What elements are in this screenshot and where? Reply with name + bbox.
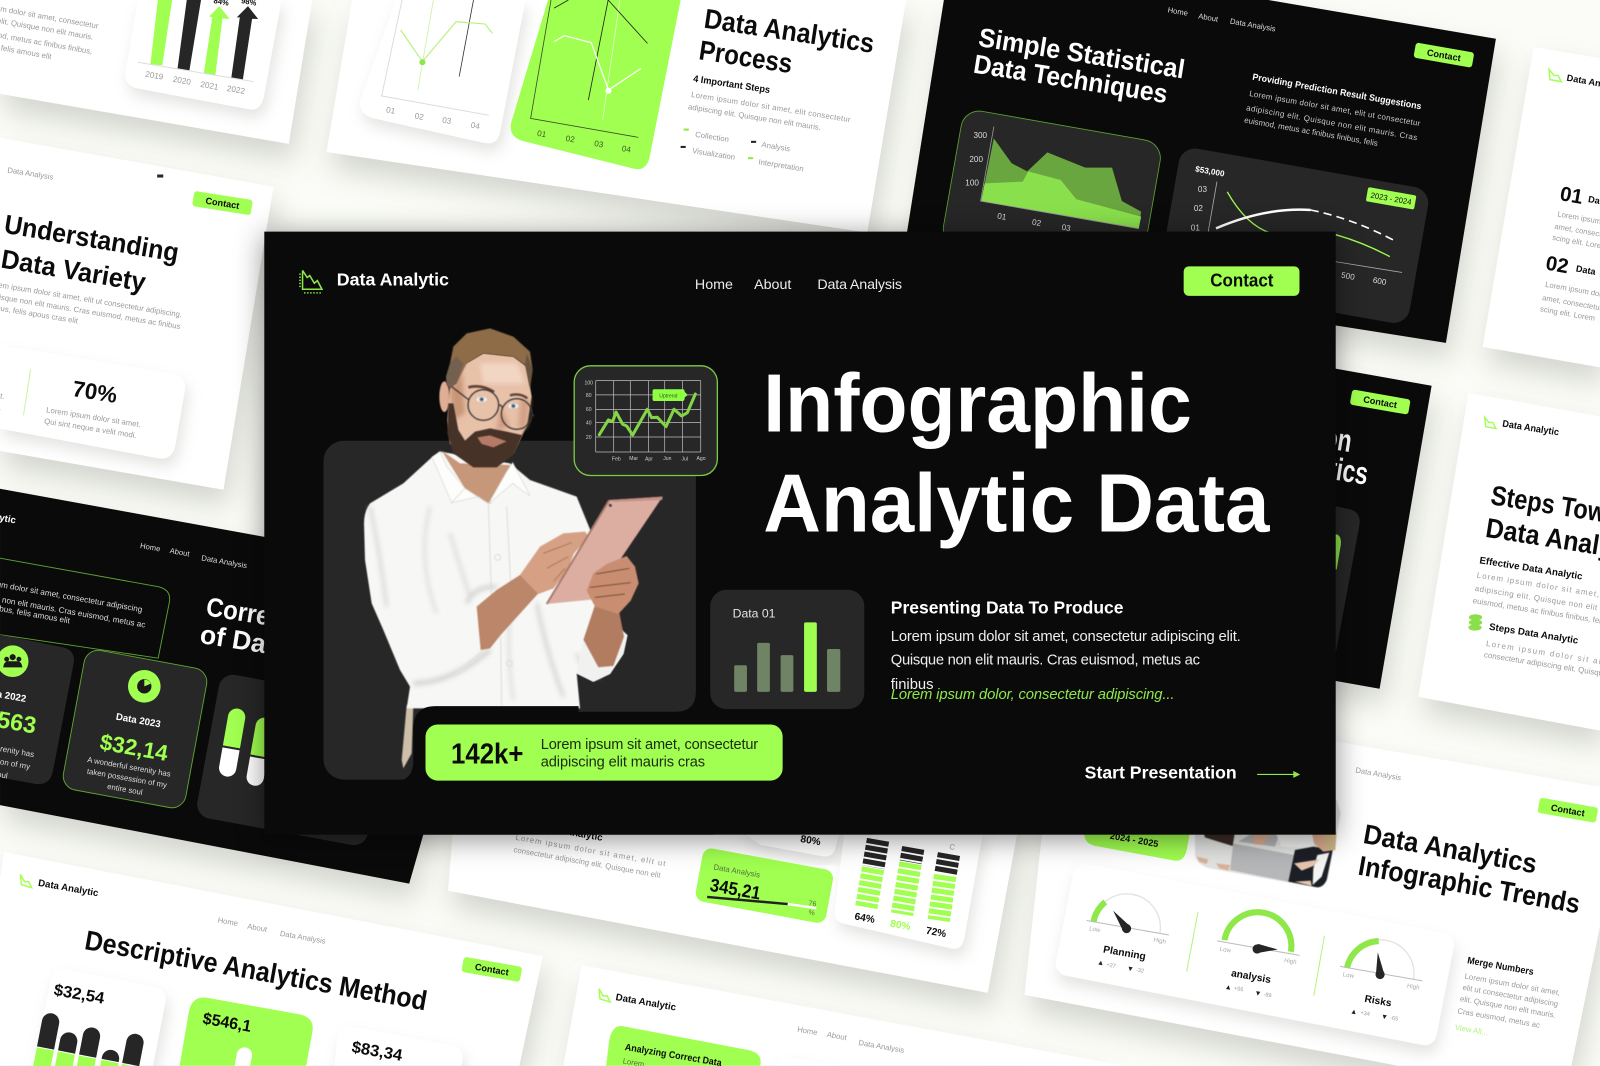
card: yearly bars: 2021 [200, 80, 220, 92]
text: 4 important steps [681, 74, 852, 173]
card: uptrend chart: Jun [663, 456, 672, 462]
card: Data 2023: $32,14 [98, 729, 170, 766]
gauge: Risks [1338, 933, 1428, 1023]
text: 4 important steps: Lorem ipsum dolor sit amet, elit consectetur [691, 90, 852, 124]
slide: Analyzing Correct Data [563, 965, 1124, 1066]
contact button [1537, 798, 1598, 823]
nav: Home [139, 541, 161, 553]
card: uptrend chart: 40 [586, 420, 592, 426]
text block: presenting data: finibus [891, 677, 934, 693]
card: 345,21: % [808, 908, 816, 917]
nav: About [1198, 11, 1220, 24]
card: yearly bars: 2020 [172, 75, 192, 87]
card: green line chart [511, 0, 681, 169]
hair [446, 328, 533, 388]
text: 4 important steps: Interpretation [758, 157, 804, 173]
slide: Correlation of Data (dark) [0, 489, 429, 884]
nav links [695, 277, 902, 293]
card: Data 2023: Data 2023 [115, 712, 162, 730]
card: white line chart [360, 0, 526, 143]
card: yearly bars: 2022 [226, 84, 246, 96]
contact button: Contact [1210, 270, 1274, 291]
left cuff [454, 648, 490, 677]
slide: right top white steps: Data [1575, 264, 1597, 277]
text: Merge Numbers: elit ut consectetur adipiscing [1462, 983, 1559, 1009]
card: Data 01 bars: Data 01 [733, 606, 776, 620]
card: green line chart: 04 [621, 144, 632, 155]
left hand [520, 532, 589, 594]
mini card 80 percent [735, 827, 841, 856]
contact button [1413, 42, 1474, 68]
card: Data 01 bars [710, 590, 864, 709]
card: 345,21 [694, 847, 835, 924]
text block: presenting data: Lorem ipsum dolor sit amet, consectetur adipiscing elit. [891, 629, 1241, 645]
gauge: Risks: +34 [1360, 1010, 1370, 1018]
card: 142k stat: adipiscing elit mauris cras [541, 754, 705, 770]
eyes and brows [476, 397, 487, 402]
card: trend chart: 02 [1194, 204, 1203, 213]
text block: predictions: euismod, metus ac finibus finibus, felis [1244, 116, 1378, 148]
card: white line chart: 02 [414, 111, 425, 122]
gauge: Planning: Low [1089, 925, 1101, 934]
heading: Infographic Trends [1356, 850, 1583, 919]
nav: About [826, 1030, 848, 1042]
text: Merge Numbers: View All... [1454, 1023, 1489, 1037]
card: 142k stat: Lorem ipsum sit amet, consectetur [541, 737, 758, 753]
card: $83,34 [335, 1026, 463, 1066]
card: segmented bars: 72% [925, 926, 947, 940]
green date tag: 2024 - 2025 [1109, 831, 1159, 849]
team photo [1193, 800, 1341, 887]
slide: bottom centre Data Analysis: consectetur adipiscing elit. Quisque non elit [513, 845, 662, 880]
heading: Correlation [204, 592, 335, 641]
card: $546,1: $546,1 [201, 1010, 253, 1036]
text block: presenting data: Lorem ipsum dolor, consectetur adipiscing... [891, 687, 1174, 703]
card: trend chart: 2023 - 2024 [1370, 191, 1413, 207]
heading [972, 22, 1187, 109]
heading: Data Analytics Process: Data Analytics [702, 3, 876, 59]
nav [139, 541, 248, 570]
icon: chart logo [300, 270, 322, 293]
text: 4 important steps: Collection [695, 130, 730, 144]
gauge: analysis: analysis [1230, 968, 1272, 986]
contact button [1184, 266, 1299, 296]
green card [606, 1026, 761, 1066]
heading: Data Techniques [972, 49, 1170, 109]
card: area chart: 100 [965, 179, 979, 188]
text: Merge Numbers: Merge Numbers [1466, 955, 1535, 978]
card: uptrend chart: Jul [681, 457, 688, 463]
text block: presenting data: Quisque non elit mauris. Cras euismod, metus ac [891, 652, 1200, 668]
card: 70 percent: Lorem ipsum dolor sit amet. [46, 405, 141, 429]
title: Analytic Data [763, 457, 1270, 550]
text: 4 important steps: adipiscing elit. Quisque non elit mauris. [687, 102, 822, 132]
text block: predictions: Providing Prediction Result Suggestions [1252, 72, 1422, 111]
slide: Data Analytics Process [327, 0, 906, 233]
main slide panel [264, 232, 1336, 835]
contact button: Contact [205, 196, 240, 211]
card: Data 2023: taken possession of my [86, 767, 168, 790]
card: uptrend chart: Mar [629, 456, 638, 462]
card: segmented bars [834, 829, 984, 949]
text block: presenting data [891, 597, 1241, 703]
heading: Data Analytics [1361, 818, 1539, 879]
heading: Data Variety [0, 244, 148, 297]
gauge: Risks: Risks [1364, 994, 1393, 1009]
card: Data 2023: entire soul [107, 782, 144, 797]
text block: predictions [1244, 72, 1422, 148]
gauge: analysis: +56 [1233, 986, 1244, 993]
heading [1356, 818, 1583, 919]
contact button: Contact [1550, 803, 1585, 818]
green date tag [1084, 821, 1192, 861]
slide: bottom centre Data Analysis: Lorem ipsum dolor sit amet, elit ut [515, 833, 667, 868]
gauge: analysis: High [1284, 957, 1297, 966]
slide: right top white steps: scing elit. Lorem [1539, 304, 1596, 323]
card: uptrend chart: 80 [586, 393, 592, 399]
slide: Steps Toward Data Analysis: Steps Data Analytic [1488, 622, 1580, 647]
card: segmented bars: C [949, 842, 956, 852]
slide: Simple Statistical Data Techniques [903, 0, 1496, 343]
nav: About [169, 546, 191, 559]
gauge: Risks: ▼ [1380, 1012, 1389, 1022]
slide: right middle dark: Contact [1362, 394, 1398, 410]
heading: of Data [198, 619, 292, 663]
gauge: Planning [1085, 887, 1175, 975]
card: segmented bars: 80% [889, 919, 911, 933]
card: 142k stat: 142k+ [451, 738, 523, 770]
slide: Descriptive Analytics Method: Data Analytic [37, 878, 100, 899]
card: green line chart: 02 [565, 134, 576, 144]
card: $83,34: $83,34 [350, 1038, 404, 1065]
gauge: Risks: Low [1342, 971, 1355, 980]
card: uptrend chart [574, 366, 717, 476]
gauge: Planning: High [1153, 937, 1166, 946]
card: Data 2023 [61, 648, 209, 810]
gauge: analysis: ▼ [1254, 989, 1262, 998]
gauge: Risks: ▲ [1350, 1007, 1358, 1016]
slide: Understanding Data Variety [0, 138, 273, 490]
gauge: analysis [1215, 906, 1306, 999]
card: area chart: 300 [973, 131, 988, 140]
card: white line chart: 03 [441, 116, 452, 126]
text block: predictions: Lorem ipsum dolor sit amet, elit ut consectetur [1249, 89, 1421, 128]
card: area chart: 03 [1061, 223, 1072, 233]
shirt silhouette [364, 452, 627, 708]
heading: Data Analytics Process [697, 3, 876, 79]
card: yearly bars: 2019 [145, 70, 164, 82]
card: 142k stat [426, 724, 783, 781]
contact button: Contact [474, 962, 509, 978]
gauge: Planning: ▼ [1126, 964, 1135, 974]
card: trend chart: 600 [1372, 276, 1388, 287]
slide: right middle dark [1229, 365, 1432, 689]
nav: Data Analysis [201, 553, 248, 570]
gauge: analysis: Low [1219, 946, 1232, 955]
card: white line chart: 01 [385, 105, 396, 116]
card: area chart: 02 [1031, 218, 1042, 228]
tablet [547, 497, 663, 604]
nav: Data Analysis [1229, 17, 1277, 34]
card: trend chart: 500 [1340, 271, 1356, 282]
title [763, 357, 1270, 550]
card: yearly bars [125, 0, 282, 110]
card: uptrend chart: Ago [696, 456, 706, 462]
card: uptrend chart: Uptrend [659, 393, 678, 399]
nav links: Data Analysis [817, 277, 902, 293]
slide: Steps Toward Data Analysis [1418, 393, 1600, 731]
placket and buttons [488, 504, 512, 706]
card: uptrend chart: 60 [586, 407, 592, 413]
nav links: About [754, 277, 791, 293]
text: Merge Numbers: Cras euismod, metus ac [1457, 1006, 1541, 1030]
text: 4 important steps: Visualization [692, 146, 736, 162]
gauge: Planning: +27 [1106, 962, 1116, 970]
card: segmented bars: 64% [854, 911, 876, 926]
text: Merge Numbers [1454, 955, 1561, 1037]
text: Merge Numbers: elit. Quisque non elit mauris. [1459, 994, 1556, 1020]
slide: bottom centre Data Analysis: Data Analytic [541, 822, 604, 844]
card: white line chart: 04 [470, 121, 481, 131]
card: green line chart: 03 [594, 139, 604, 150]
card: trend chart: 01 [1191, 224, 1200, 233]
heading [198, 592, 335, 663]
nav: Data Analysis [279, 929, 327, 946]
shirt shading [370, 507, 600, 700]
card: 70 percent: 70% [71, 376, 119, 408]
gauge: analysis: -89 [1263, 992, 1272, 999]
card: gauges [1054, 861, 1456, 1047]
slide: Analyzing Correct Data: Data Analytic [615, 992, 677, 1014]
slide: Descriptive Analytics Method [0, 852, 543, 1066]
trouser sliver [402, 705, 413, 768]
gauge: analysis: ▲ [1224, 983, 1232, 992]
header: logo: Data Analytic [337, 270, 449, 290]
card: 70 percent: Qui sint neque a velit modi. [44, 417, 137, 440]
slide: Data Analytics Infographic Trends [1024, 694, 1600, 1066]
slide: Steps Toward Data Analysis: Effective Data Analytic [1479, 555, 1584, 583]
gauge: Risks: High [1406, 983, 1420, 992]
face shading [450, 363, 530, 432]
logo small [20, 874, 32, 888]
person with tablet [364, 328, 663, 768]
slide: Understanding Data Variety: Data Analysis [7, 166, 54, 182]
slide: right top white steps: 02 [1544, 253, 1570, 278]
slide: top-left white bar chart: felis amous elit [0, 43, 53, 61]
face [447, 353, 532, 467]
slide: top-left white bar chart [0, 0, 312, 144]
ear [439, 381, 449, 412]
outlined text card [0, 558, 170, 658]
card: 70 percent [0, 345, 185, 459]
beard [447, 403, 527, 467]
nav: Home [217, 916, 239, 928]
heading [0, 209, 181, 297]
nav: Data Analysis [858, 1038, 905, 1055]
nav [1167, 5, 1277, 34]
header: logo [300, 270, 449, 293]
gauge: Planning: -32 [1135, 967, 1144, 975]
neck [442, 451, 510, 504]
text block: presenting data: Presenting Data To Produce [891, 597, 1124, 617]
panel: portrait background [323, 441, 696, 780]
card: uptrend chart: 100 [585, 381, 593, 387]
slide: right top white steps [1483, 47, 1600, 367]
card: trend chart: $53,000 [1195, 165, 1226, 179]
card: uptrend chart: Apr [645, 457, 653, 463]
heading: Data Analytics Process: Process [697, 34, 795, 79]
card: 345,21: 345,21 [708, 874, 762, 904]
card: green line chart: 01 [536, 129, 547, 139]
collar [432, 452, 530, 504]
gauge: Planning: Planning [1102, 944, 1147, 963]
card: Data 2022 [0, 635, 74, 784]
card: trend chart: 03 [1198, 185, 1207, 194]
heading: Descriptive Analytics Method [83, 924, 430, 1016]
text block: predictions: adipiscing elit. Quisque non elit mauris. Cras [1246, 103, 1418, 142]
right forearm [583, 605, 624, 667]
nav: Home [797, 1025, 818, 1037]
glasses [452, 387, 534, 429]
card: $32,54 [33, 969, 166, 1066]
card: area chart [940, 108, 1163, 279]
slide: right middle dark: Correlation [1229, 405, 1354, 459]
card: trend chart [1158, 146, 1431, 326]
title: Infographic [763, 357, 1192, 450]
contact button [192, 191, 253, 215]
card: Data 2023: A wonderful serenity has [87, 755, 171, 779]
nav [217, 916, 327, 946]
text: 4 important steps: Analysis [761, 140, 791, 153]
slide: bottom centre Data Analysis [448, 816, 1020, 993]
gauge: Risks: -65 [1389, 1015, 1398, 1023]
nav [797, 1025, 905, 1055]
contact button: Contact [1426, 47, 1461, 63]
start presentation link with arrow: Start Presentation [1085, 763, 1237, 783]
portrait notch [393, 691, 714, 835]
heading: Understanding [2, 209, 181, 268]
card: $546,1 [180, 997, 313, 1066]
card: pills chart [195, 672, 392, 848]
text: 4 important steps: 4 Important Steps [692, 74, 771, 96]
card: uptrend chart: 20 [586, 435, 592, 441]
contact button [461, 957, 522, 982]
right hand [587, 556, 639, 614]
heading: Simple Statistical [977, 22, 1187, 84]
slide: right top white steps: 01 [1558, 183, 1584, 209]
nav links: Home [695, 277, 733, 293]
card: area chart: 01 [997, 211, 1008, 222]
left forearm [477, 572, 538, 650]
slide: Steps Toward Data Analysis: Data Analytic [1502, 419, 1560, 439]
card: 345,21: 76 [808, 899, 817, 908]
card: 345,21: Data Analysis [713, 862, 761, 880]
nav: Data Analysis [1355, 766, 1402, 782]
slide: right middle dark: Analytics [1265, 441, 1371, 491]
card: $32,54: $32,54 [52, 981, 106, 1008]
gauge: Planning: ▲ [1097, 958, 1105, 967]
icon: database [1468, 614, 1482, 631]
mini card 80 percent: 80% [799, 834, 821, 848]
nav: About [247, 922, 269, 934]
nav: Home [1167, 5, 1189, 18]
card: uptrend chart: Feb [612, 457, 621, 463]
text: Merge Numbers: Lorem ipsum dolor sit amet, [1464, 972, 1561, 997]
card: area chart: 200 [969, 155, 983, 164]
